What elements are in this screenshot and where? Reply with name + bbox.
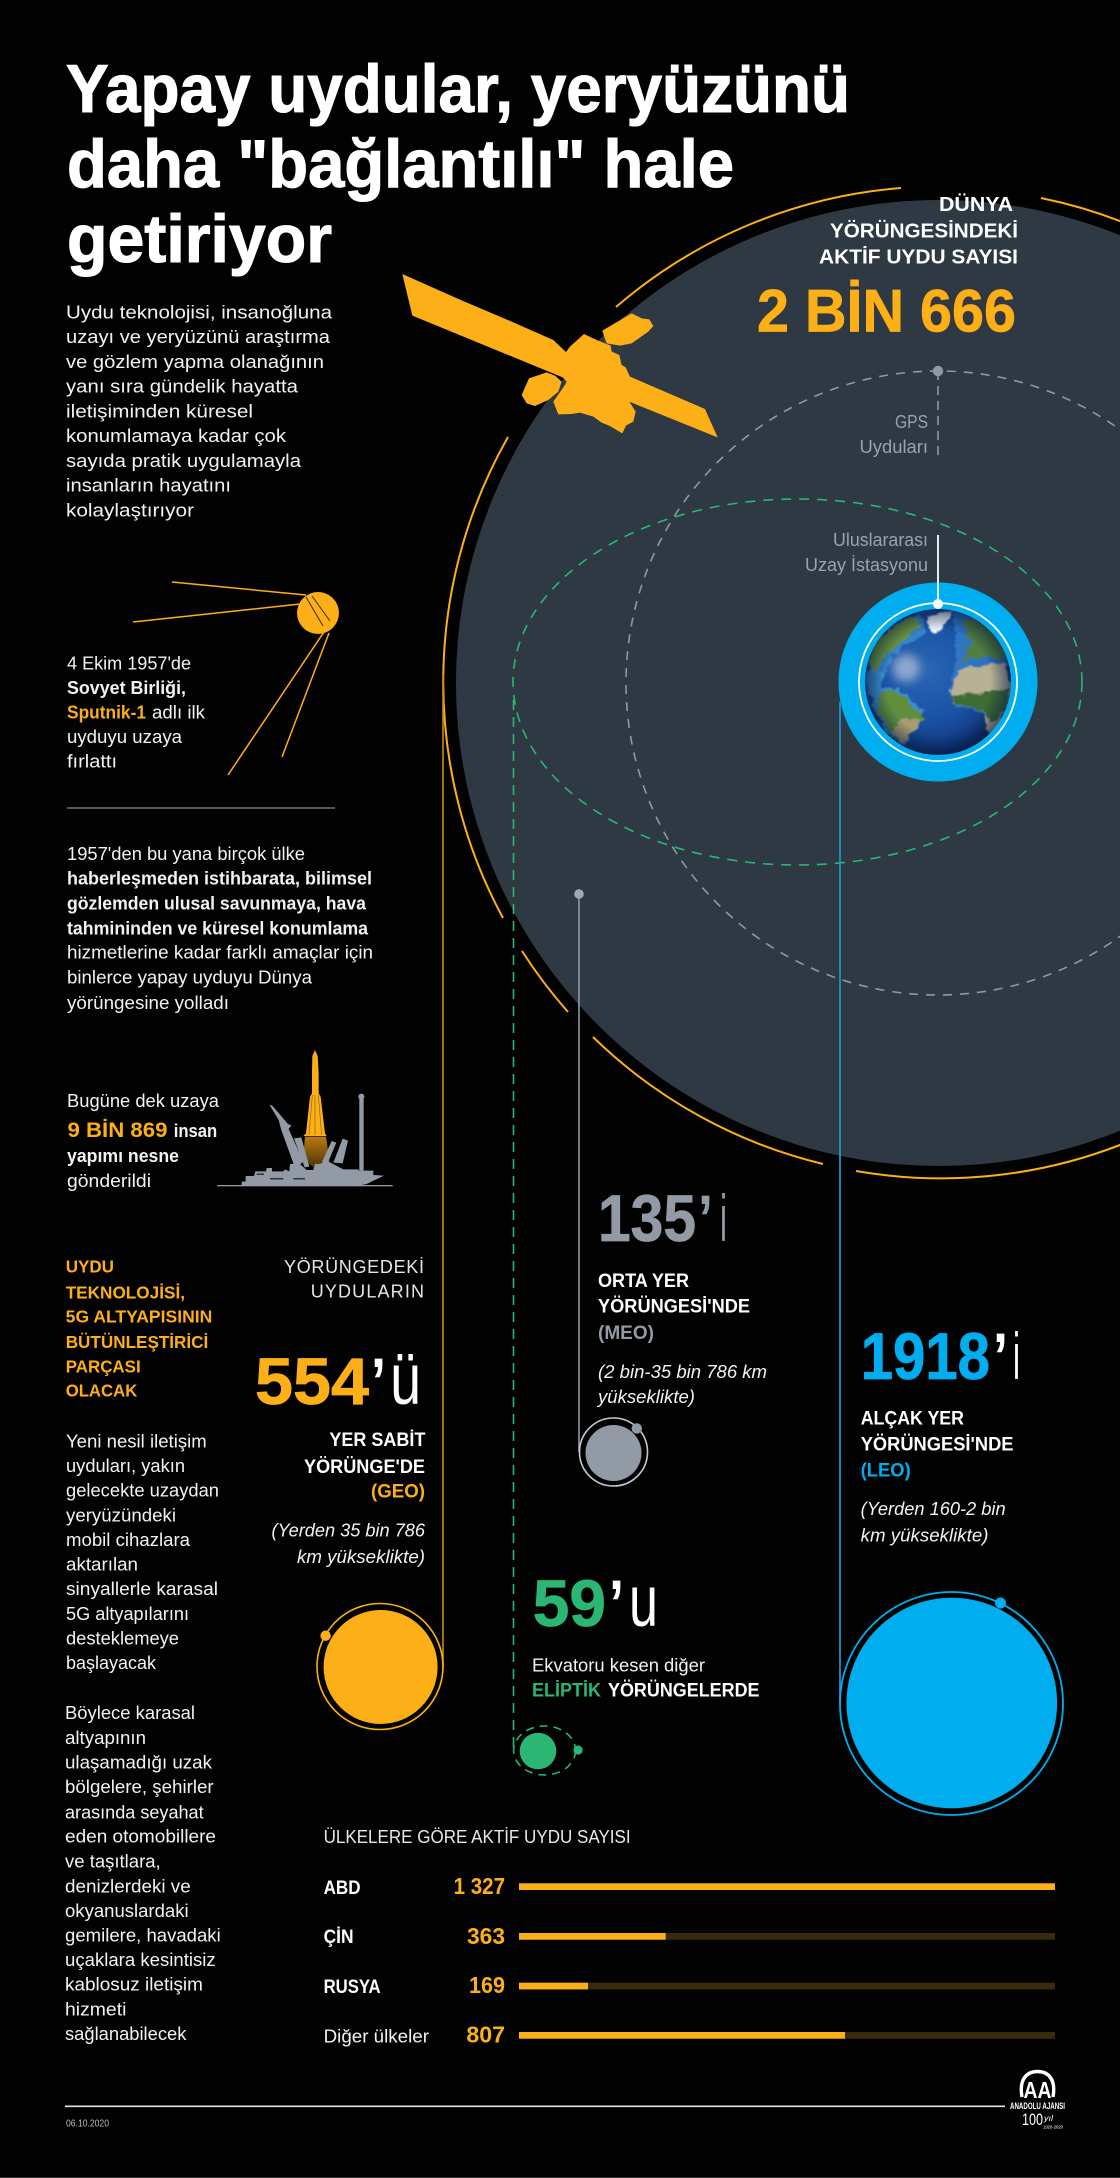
row: Russia: RUSYA: [324, 1977, 381, 1998]
label: satellites in orbit: UYDULARIN: [311, 1282, 424, 1302]
text: Sputnik-1 launch: adlı ilk: [152, 703, 206, 723]
label: satellites in orbit: [284, 1257, 424, 1302]
intro text: sayıda pratik uygulamayla: [66, 451, 302, 471]
headline stat: active satellites: [757, 193, 1018, 344]
section: 5G heading: UYDU: [66, 1257, 114, 1277]
stat: MEO 135: i: [720, 1181, 727, 1255]
title: getiriyor: [67, 201, 332, 277]
text: purposes of satellites: [67, 844, 373, 1013]
text: 5G paragraph two: ve taşıtlara,: [65, 1851, 161, 1871]
title: daha "bağlantılı" hale: [67, 126, 734, 202]
section: 5G heading: 5G ALTYAPISININ: [66, 1307, 212, 1327]
icon: elliptical planet and orbit: [514, 1726, 583, 1775]
row: other countries: 807: [466, 2022, 505, 2048]
text: 5G paragraph one: uyduları, yakın: [66, 1456, 185, 1476]
icon: GEO planet and orbit: [317, 1604, 443, 1730]
text: 5G paragraph two: [65, 1703, 221, 2044]
text: objects sent to space: gönderildi: [67, 1171, 151, 1191]
icon: rocket on launch pad: [217, 1050, 393, 1186]
text: Sputnik-1 launch: 4 Ekim 1957'de: [67, 654, 191, 674]
MEO connector line with dot: [574, 889, 584, 1452]
text: purposes of satellites: yörüngesine yolladı: [67, 993, 229, 1013]
text: purposes of satellites: tahmininden ve küresel konumlama: [67, 919, 369, 939]
text: Sputnik-1 launch: Sputnik-1: [67, 703, 146, 723]
text: 5G paragraph two: uçaklara kesintisiz: [65, 1950, 216, 1970]
elliptical orbit dashed ellipse: [513, 499, 1082, 865]
row: other countries: [324, 2022, 1055, 2048]
stat: MEO 135: YÖRÜNGESİ'NDE: [598, 1297, 750, 1318]
GEO connector line: [442, 674, 444, 1668]
Earth orbit panel: large dark circle: [456, 200, 1120, 1166]
title: Yapay uydular, yeryüzünü: [66, 51, 850, 127]
bar chart: active satellites by country: [324, 1827, 1055, 2048]
logo: Anadolu Ajansı: 100: [1022, 2110, 1043, 2129]
stat: GEO 554: YER SABİT: [329, 1430, 426, 1451]
text: 5G paragraph one: gelecekte uzaydan: [66, 1481, 219, 1501]
intro text: [66, 302, 333, 520]
text: 5G paragraph two: arasında seyahat: [65, 1802, 204, 1822]
intro text: ve gözlem yapma olanağının: [66, 352, 324, 372]
intro text: uzayı ve yeryüzünü araştırma: [66, 327, 331, 347]
headline stat: active satellites: AKTİF UYDU SAYISI: [819, 246, 1018, 268]
orange outer orbit arcs: [443, 188, 1120, 1178]
stat: GEO 554: YÖRÜNGE'DE: [304, 1457, 425, 1478]
text: purposes of satellites: 1957'den bu yana birçok ülke: [67, 844, 305, 864]
elliptical connector line: [512, 700, 514, 1750]
stat: elliptical 59: [532, 1562, 760, 1702]
stat: elliptical 59: YÖRÜNGELERDE: [608, 1680, 760, 1702]
icon: MEO planet and orbit: [580, 1418, 648, 1486]
text: 5G paragraph one: aktarılan: [66, 1555, 138, 1575]
stat: LEO 1918: [861, 1319, 1020, 1546]
label: International Space Station: Uluslararası: [833, 530, 928, 550]
intro text: iletişiminden küresel: [66, 402, 253, 422]
text: objects sent to space: insan: [174, 1121, 217, 1141]
stat: LEO 1918: ALÇAK YER: [861, 1409, 964, 1430]
stat: GEO 554: 554: [255, 1344, 369, 1418]
stat: LEO 1918: ’: [993, 1319, 1008, 1393]
icon: satellite silhouette: [402, 274, 718, 437]
text: 5G paragraph two: denizlerdeki ve: [65, 1876, 191, 1896]
text: 5G paragraph two: okyanuslardaki: [65, 1901, 189, 1921]
stat: MEO 135: [596, 1181, 767, 1407]
icon: LEO planet and orbit: [840, 1592, 1063, 1815]
section: 5G heading: [66, 1257, 212, 1401]
text: 5G paragraph two: gemilere, havadaki: [65, 1926, 221, 1946]
logo: Anadolu Ajansı: ANADOLU AJANSI: [1010, 2101, 1065, 2112]
row: China: [324, 1923, 1055, 1949]
stat: LEO 1918: (Yerden 160-2 bin: [861, 1499, 1006, 1519]
text: 5G paragraph two: ulaşamadığı uzak: [65, 1752, 213, 1772]
date: 06.10.2020: [66, 2118, 109, 2130]
GPS marker with dashed leader: [933, 366, 943, 457]
stat: MEO 135: 135: [598, 1181, 696, 1255]
stat: GEO 554: (Yerden 35 bin 786: [272, 1521, 426, 1541]
title: [66, 51, 850, 277]
stat: LEO 1918: (LEO): [861, 1461, 911, 1482]
text: 5G paragraph two: altyapının: [65, 1728, 146, 1748]
text: 5G paragraph two: Böylece karasal: [65, 1703, 195, 1723]
text: objects sent to space: Bugüne dek uzaya: [67, 1091, 220, 1111]
text: objects sent to space: yapımı nesne: [67, 1146, 179, 1166]
section: 5G heading: TEKNOLOJİSİ,: [66, 1283, 185, 1303]
text: 5G paragraph two: kablosuz iletişim: [65, 1975, 203, 1995]
text: objects sent to space: [67, 1091, 220, 1191]
icon: Sputnik: [133, 582, 339, 775]
label: International Space Station: [805, 530, 928, 575]
text: i: [1013, 1319, 1020, 1393]
text: 5G paragraph one: Yeni nesil iletişim: [66, 1431, 207, 1451]
Earth with LEO band: [838, 582, 1038, 782]
headline stat: active satellites: DÜNYA: [939, 193, 1013, 216]
label: GPS satellites: GPS: [895, 412, 928, 432]
stat: MEO 135: (2 bin-35 bin 786 km: [598, 1362, 767, 1382]
text: 5G paragraph one: [66, 1431, 219, 1673]
stat: MEO 135: yükseklikte): [596, 1387, 695, 1407]
text: 5G paragraph one: sinyallerle karasal: [66, 1579, 218, 1599]
row: China: ÇİN: [324, 1927, 354, 1948]
row: Russia: 169: [469, 1972, 505, 1998]
intro text: insanların hayatını: [66, 476, 231, 496]
text: objects sent to space: 9 BİN 869: [68, 1119, 168, 1142]
headline stat: active satellites: YÖRÜNGESİNDEKİ: [830, 220, 1018, 242]
stat: GEO 554: (GEO): [371, 1482, 425, 1503]
text: purposes of satellites: haberleşmeden istihbarata, bilimsel: [67, 869, 372, 889]
row: USA: [324, 1873, 1055, 1899]
label: International Space Station: Uzay İstasyonu: [805, 555, 928, 575]
text: 5G paragraph one: 5G altyapılarını: [66, 1604, 189, 1624]
intro text: kolaylaştırıyor: [66, 500, 194, 520]
stat: GEO 554: km yükseklikte): [297, 1547, 425, 1567]
text: 5G paragraph two: hizmeti: [65, 2000, 126, 2020]
intro text: Uydu teknolojisi, insanoğluna: [66, 302, 333, 322]
text: 5G paragraph two: bölgelere, şehirler: [65, 1777, 214, 1797]
text: 5G paragraph one: başlayacak: [66, 1653, 157, 1673]
section: 5G heading: PARÇASI: [66, 1357, 141, 1377]
stat: GEO 554: ’: [371, 1344, 386, 1418]
text: purposes of satellites: gözlemden ulusal savunmaya, hava: [67, 894, 367, 914]
text: purposes of satellites: hizmetlerine kadar farklı amaçlar için: [67, 943, 373, 963]
stat: LEO 1918: YÖRÜNGESİ'NDE: [861, 1434, 1014, 1455]
intro text: yanı sıra gündelik hayatta: [66, 377, 299, 397]
intro text: konumlamaya kadar çok: [66, 426, 287, 446]
text: Sputnik-1 launch: Sovyet Birliği,: [67, 678, 186, 698]
stat: LEO 1918: km yükseklikte): [861, 1526, 988, 1546]
text: 5G paragraph one: desteklemeye: [66, 1628, 179, 1648]
stat: elliptical 59: 59: [533, 1566, 606, 1640]
text: Sputnik-1 launch: [67, 654, 206, 772]
row: USA: ABD: [324, 1878, 361, 1899]
row: China: 363: [467, 1923, 505, 1949]
stat: MEO 135: (MEO): [598, 1323, 654, 1344]
stat: MEO 135: ’: [698, 1181, 713, 1255]
stat: elliptical 59: ELİPTİK: [532, 1680, 601, 1702]
section: 5G heading: BÜTÜNLEŞTİRİCİ: [66, 1332, 208, 1352]
logo: Anadolu Ajansı: 1920-2020: [1043, 2124, 1063, 2130]
chart title: ÜLKELERE GÖRE AKTİF UYDU SAYISI: [324, 1827, 631, 1847]
row: other countries: Diğer ülkeler: [324, 2027, 429, 2047]
LEO connector line: [839, 702, 841, 1703]
logo: Anadolu Ajansı: [1010, 2072, 1065, 2130]
stat: elliptical 59: Ekvatoru kesen diğer: [532, 1656, 705, 1676]
row: USA: 1 327: [454, 1873, 505, 1899]
text: 5G paragraph two: sağlanabilecek: [65, 2024, 187, 2044]
stat: MEO 135: ORTA YER: [598, 1271, 689, 1292]
GPS orbit dashed circle: [626, 371, 1120, 995]
label: satellites in orbit: YÖRÜNGEDEKİ: [284, 1257, 424, 1277]
stat: elliptical 59: ’: [609, 1566, 624, 1640]
text: 5G paragraph two: eden otomobillere: [65, 1827, 216, 1847]
label: GPS satellites: [860, 412, 928, 457]
headline stat: active satellites: 2 BİN 666: [757, 278, 1016, 344]
section: 5G heading: OLACAK: [66, 1381, 138, 1401]
stat: GEO 554: ü: [390, 1340, 421, 1420]
text: 5G paragraph one: mobil cihazlara: [66, 1530, 191, 1550]
stat: elliptical 59: u: [629, 1562, 658, 1642]
stat: GEO 554: [255, 1340, 426, 1567]
logo: Anadolu Ajansı: AA: [1024, 2077, 1052, 2103]
ISS marker: [933, 535, 943, 609]
logo: Anadolu Ajansı: yıl: [1043, 2114, 1053, 2123]
text: Sputnik-1 launch: uyduyu uzaya: [67, 727, 183, 747]
text: purposes of satellites: binlerce yapay uyduyu Dünya: [67, 968, 313, 988]
text: 5G paragraph one: yeryüzündeki: [66, 1506, 176, 1526]
label: GPS satellites: Uyduları: [860, 437, 928, 457]
stat: LEO 1918: 1918: [861, 1319, 990, 1393]
text: Sputnik-1 launch: fırlattı: [67, 752, 117, 772]
row: Russia: [324, 1972, 1055, 1998]
